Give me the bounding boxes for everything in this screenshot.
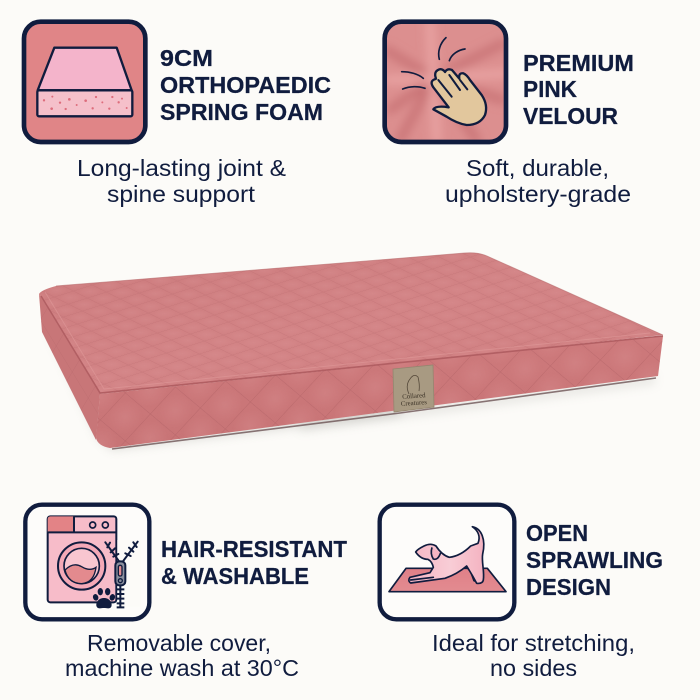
brand label bbox=[393, 365, 434, 412]
panel: open sprawling design feature bbox=[380, 505, 663, 681]
heading: 9cm orthopaedic spring foam bbox=[160, 45, 331, 125]
text: washable description: machine wash at 30°C bbox=[65, 655, 299, 681]
product photo: quilted pink dog bed bbox=[39, 253, 663, 450]
heading: premium pink velour: VELOUR bbox=[523, 103, 618, 129]
heading: hair-resistant and washable: & WASHABLE bbox=[161, 563, 309, 589]
text: velour description: upholstery-grade bbox=[445, 181, 631, 207]
text: foam description bbox=[77, 155, 286, 207]
panel: orthopaedic foam feature bbox=[24, 22, 331, 207]
brand label: Creatures bbox=[401, 399, 427, 408]
dog far hind leg bbox=[465, 565, 482, 583]
text: washable description bbox=[65, 630, 299, 681]
icon: foam mattress block bbox=[24, 22, 145, 142]
brand label: Collared bbox=[402, 392, 426, 401]
text: velour description: Soft, durable, bbox=[466, 155, 609, 181]
heading: premium pink velour: PINK bbox=[523, 76, 577, 102]
heading: premium pink velour: PREMIUM bbox=[523, 50, 634, 76]
heading: open sprawling design bbox=[526, 520, 663, 600]
icon: hand stroking velour bbox=[385, 22, 507, 142]
mattress quilted top bbox=[39, 253, 663, 394]
heading: open sprawling design: DESIGN bbox=[526, 574, 611, 600]
icon: dog stretching on mat bbox=[380, 505, 514, 619]
mattress left side bbox=[39, 294, 100, 440]
text: foam description: Long-lasting joint & bbox=[77, 155, 286, 181]
icon: washing machine, zip and paw bbox=[25, 505, 149, 619]
panel: velour feature bbox=[385, 22, 634, 207]
heading: open sprawling design: SPRAWLING bbox=[526, 547, 663, 573]
text: velour description bbox=[445, 155, 631, 207]
text: sprawling description: no sides bbox=[490, 655, 577, 681]
heading: hair-resistant and washable: HAIR-RESISTANT bbox=[161, 536, 348, 562]
heading: open sprawling design: OPEN bbox=[526, 520, 588, 546]
heading: premium pink velour bbox=[523, 50, 634, 129]
heading: 9cm orthopaedic spring foam: SPRING FOAM bbox=[160, 99, 323, 125]
text: washable description: Removable cover, bbox=[87, 630, 271, 656]
text: foam description: spine support bbox=[107, 181, 256, 207]
text: sprawling description: Ideal for stretching, bbox=[432, 630, 635, 656]
heading: hair-resistant and washable bbox=[161, 536, 348, 589]
text: sprawling description bbox=[432, 630, 635, 681]
piping seams bbox=[41, 296, 663, 393]
panel: washable feature bbox=[25, 505, 348, 681]
heading: 9cm orthopaedic spring foam: 9CM bbox=[160, 45, 213, 71]
heading: 9cm orthopaedic spring foam: ORTHOPAEDIC bbox=[160, 72, 331, 98]
mattress front side bbox=[96, 336, 663, 448]
